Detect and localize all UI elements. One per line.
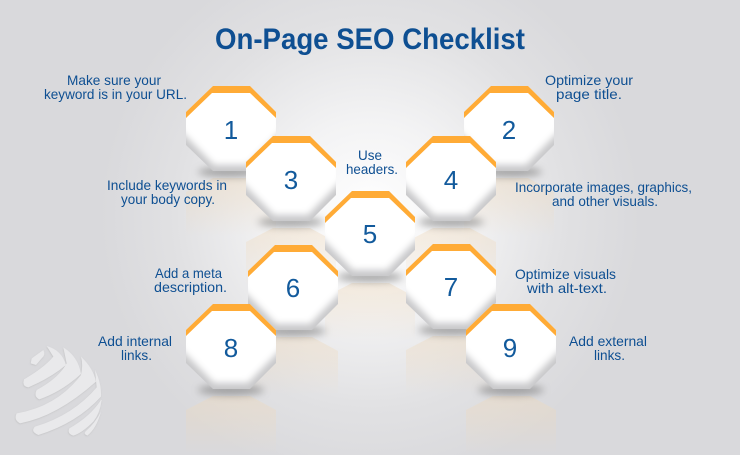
label 1: Make sure your — [67, 72, 161, 88]
step 9 — [460, 294, 562, 395]
title: On-Page SEO Checklist — [215, 23, 525, 56]
label 6 — [154, 265, 227, 295]
label 7 — [515, 266, 616, 296]
step 9: 9 — [503, 333, 517, 363]
label 3 — [107, 177, 227, 207]
icon: striped globe watermark — [16, 346, 102, 436]
label 7: with alt-text. — [526, 280, 607, 296]
step 1 — [180, 76, 282, 177]
label 5 — [346, 147, 398, 177]
label 6: description. — [154, 279, 227, 295]
label 3: Include keywords in — [107, 177, 227, 193]
label 3: your body copy. — [121, 191, 215, 207]
label 8 — [98, 333, 172, 363]
step 1: 1 — [224, 115, 238, 145]
label 2 — [545, 72, 633, 102]
step 3 — [240, 126, 342, 227]
label 5: headers. — [346, 161, 398, 177]
label 4: and other visuals. — [552, 193, 658, 209]
label 5: Use — [358, 147, 382, 163]
step 3: 3 — [284, 165, 298, 195]
step 7: 7 — [444, 272, 458, 302]
label 2: page title. — [556, 86, 622, 102]
step 6 — [242, 235, 344, 336]
label 4: Incorporate images, graphics, — [515, 179, 692, 195]
label 9: Add external — [569, 333, 647, 349]
label 1 — [44, 72, 187, 102]
label 9 — [569, 333, 647, 363]
step 6: 6 — [286, 273, 300, 303]
step 5 — [319, 181, 421, 282]
step 2 — [458, 76, 560, 177]
label 1: keyword is in your URL. — [44, 86, 187, 102]
octagon reflections — [186, 178, 556, 454]
step 8 — [180, 294, 282, 395]
label 9: links. — [594, 347, 625, 363]
step 4: 4 — [444, 165, 458, 195]
label 2: Optimize your — [545, 72, 633, 88]
step 2: 2 — [502, 115, 516, 145]
step 5: 5 — [363, 219, 377, 249]
label 8: Add internal — [98, 333, 172, 349]
label 8: links. — [121, 347, 152, 363]
label 6: Add a meta — [155, 265, 222, 281]
label 4 — [515, 179, 692, 209]
step 7 — [400, 234, 502, 335]
label 7: Optimize visuals — [515, 266, 616, 282]
step 4 — [400, 126, 502, 227]
step 8: 8 — [224, 333, 238, 363]
